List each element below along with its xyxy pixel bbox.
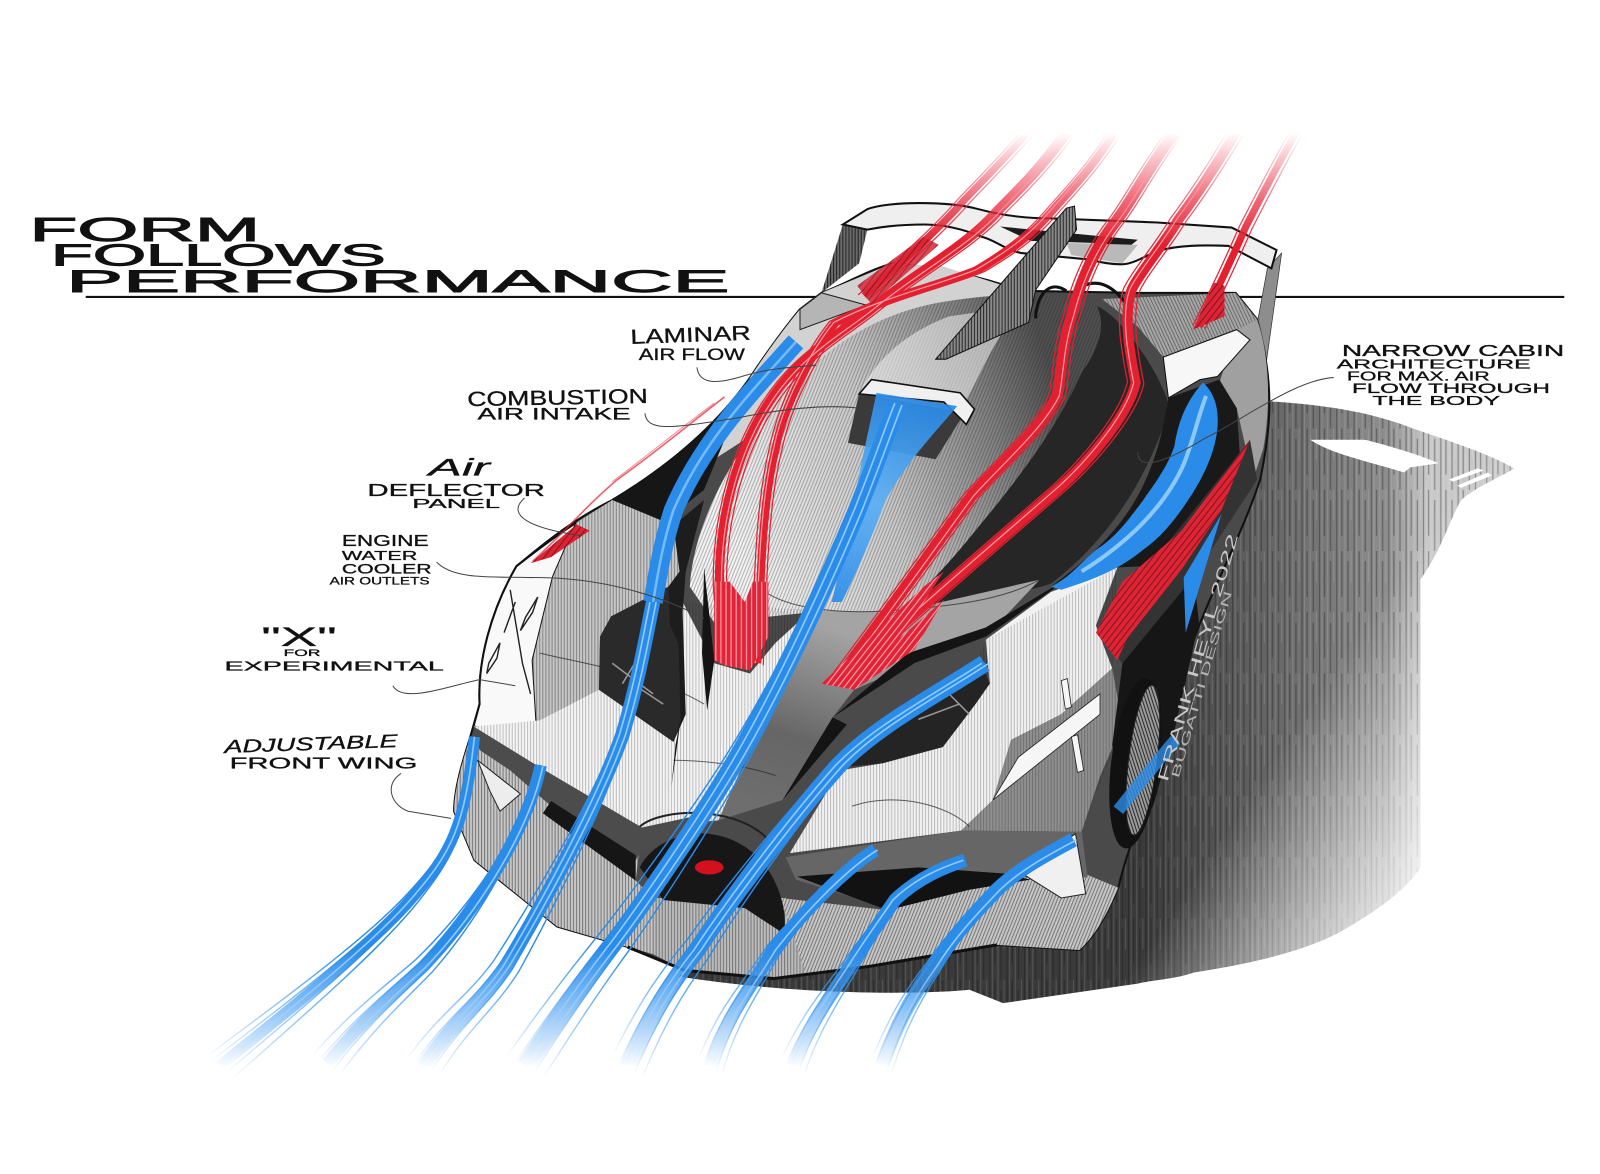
left under-deflector edge: [599, 587, 673, 742]
right headlight stripe: [993, 679, 1100, 800]
front lower left bodywork: [454, 727, 707, 954]
label: laminar air flow: AIR FLOW: [639, 346, 746, 364]
front hood right surface: [790, 567, 1117, 853]
dark hood spikes: [671, 567, 1076, 800]
central roof fin: [936, 206, 1077, 359]
hatching across hood: [473, 567, 1122, 853]
label: narrow cabin architecture: [1138, 343, 1564, 463]
label: engine water cooler air outlets: COOLER: [342, 561, 432, 577]
left wing endplate: [821, 224, 867, 293]
label: air deflector panel: [367, 455, 582, 536]
right air dam: [786, 831, 1088, 908]
hood feature lines: [480, 580, 1040, 898]
label: narrow cabin architecture: NARROW CABIN: [1342, 343, 1564, 360]
label: X for experimental: [224, 622, 515, 694]
label: X for experimental: FOR: [284, 648, 321, 658]
title: Form Follows Performance: FOLLOWS: [51, 238, 386, 272]
side red intake frame: [1096, 440, 1257, 663]
label: narrow cabin architecture: ARCHITECTURE: [1337, 356, 1531, 371]
label: narrow cabin architecture: FLOW THROUGH: [1352, 381, 1550, 397]
label: laminar air flow: [630, 323, 816, 382]
left black band to the intake: [668, 500, 704, 742]
label: adjustable front wing: FRONT WING: [230, 755, 417, 772]
rear right bodywork: [1051, 293, 1268, 587]
signature: BUGATTI DESIGN: [1170, 590, 1235, 779]
label: combustion air intake: [467, 386, 859, 427]
dark canopy side: [898, 306, 1169, 612]
red badge: [695, 860, 723, 874]
wing blade: [843, 203, 1277, 268]
right lower scoop: [1020, 834, 1086, 898]
label: engine water cooler air outlets: [330, 533, 704, 618]
label: X for experimental: EXPERIMENTAL: [224, 658, 444, 673]
fender marker outlines: [487, 590, 538, 694]
central hood and canopy: [690, 295, 1101, 622]
left dark intake: [600, 597, 681, 742]
wing centre shadow: [1000, 227, 1138, 248]
badge horseshoe grille: [640, 813, 785, 934]
label: air deflector panel: DEFLECTOR: [367, 480, 545, 500]
intake fan: [832, 393, 957, 602]
front-left fender white surface: [473, 522, 577, 729]
label: adjustable front wing: [222, 730, 451, 818]
raised spine to fin: [859, 306, 1020, 403]
centre-left white hood strip: [473, 602, 811, 828]
rear wing assembly: [821, 203, 1282, 369]
upper dark edge band: [473, 727, 707, 860]
label: combustion air intake: COMBUSTION: [467, 386, 648, 411]
signature: FRANK HEYL 2022: [1155, 532, 1242, 784]
right fender lower surface: [961, 668, 1122, 832]
label: X for experimental: "X": [261, 622, 337, 652]
front wheel: [1101, 675, 1170, 851]
side canopy stream: [1051, 383, 1218, 590]
intake bucket on roof: [848, 380, 974, 459]
signature: [1155, 532, 1242, 784]
stream highlights: [219, 403, 1077, 1068]
label: narrow cabin architecture: THE BODY: [1372, 393, 1500, 408]
right dark intake: [840, 660, 990, 767]
label: engine water cooler air outlets: WATER: [342, 548, 417, 563]
stream outer strands: [207, 393, 1083, 1079]
white side panel: [1163, 330, 1250, 398]
front lower right bodywork: [781, 831, 1118, 974]
left black slot: [543, 801, 636, 881]
dark side channel: [1051, 380, 1240, 587]
left lower winglet: [478, 760, 520, 811]
label: laminar air flow: LAMINAR: [630, 323, 751, 349]
front splitter centre lower: [653, 898, 806, 979]
label: adjustable front wing: ADJUSTABLE: [222, 730, 399, 757]
title: Form Follows Performance: PERFORMANCE: [66, 263, 730, 299]
car body silhouette: [454, 263, 1269, 979]
label: combustion air intake: AIR INTAKE: [478, 405, 631, 423]
blue air streams: [207, 342, 1221, 1079]
nose centre wedge: [718, 580, 1040, 820]
air deflector panel: [533, 500, 680, 727]
dark wheel arch: [1112, 577, 1199, 837]
label: engine water cooler air outlets: ENGINE: [342, 533, 429, 550]
wing lower centre panel: [1066, 243, 1138, 263]
car ground shadow: [679, 401, 1514, 1003]
red filled panels: [531, 237, 1250, 690]
cockpit hoop: [1036, 283, 1128, 318]
red air streams: [533, 132, 1302, 685]
label: air deflector panel: PANEL: [412, 496, 500, 511]
shadow window cutouts: [1310, 440, 1492, 488]
horizontal title rule: [86, 296, 1564, 298]
right wing strut: [1251, 253, 1282, 369]
title: Form Follows Performance: FORM: [30, 212, 260, 249]
label: air deflector panel: Air: [424, 455, 492, 482]
front edge line: [628, 945, 997, 979]
rear left haunch: [612, 263, 1020, 531]
label: narrow cabin architecture: FOR MAX. AIR: [1347, 369, 1490, 384]
label: engine water cooler air outlets: AIR OUTLETS: [330, 576, 430, 588]
title: Form Follows Performance: [30, 212, 730, 299]
